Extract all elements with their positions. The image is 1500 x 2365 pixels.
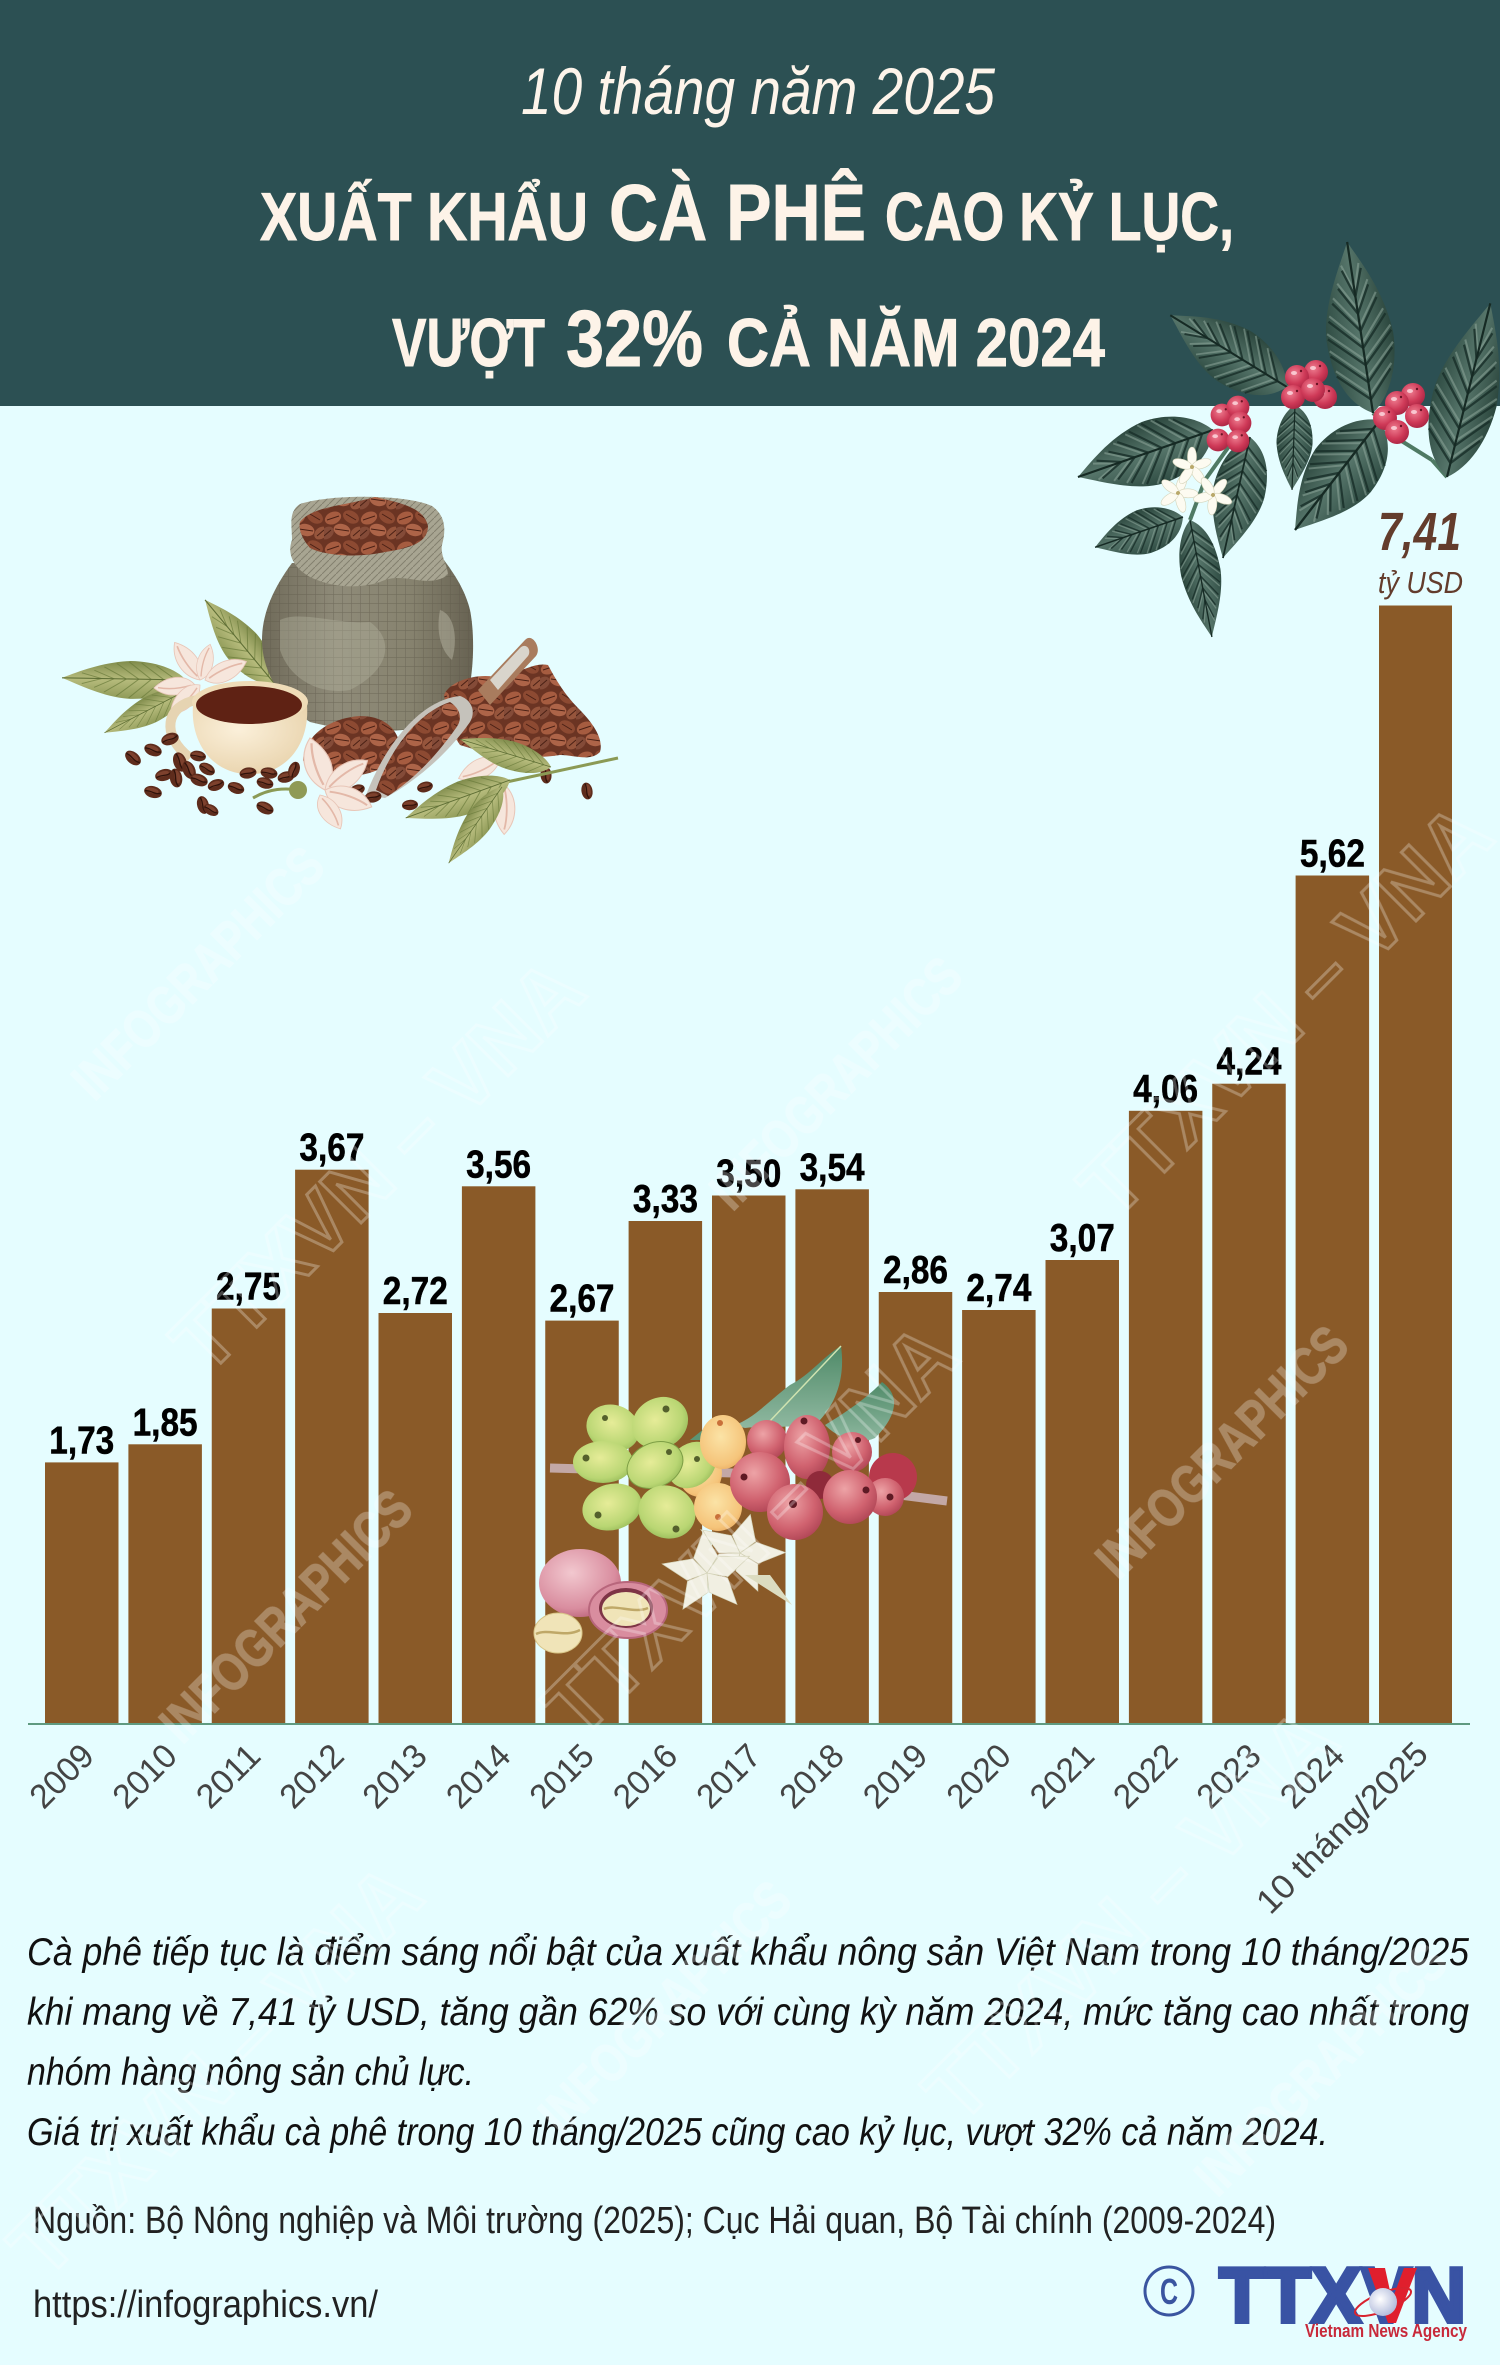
value labels: 1,85 (133, 1401, 198, 1444)
highlighted value 7,41 (1378, 502, 1463, 600)
value labels: 2,72 (383, 1270, 448, 1313)
axis labels: 2017 (689, 1737, 768, 1816)
watermarks: TTXVN – VNA (0, 1846, 440, 2295)
body text: nhóm hàng nông sản chủ lực. (27, 2051, 474, 2094)
title: CẢ NĂM 2024 (727, 304, 1105, 381)
value labels: 5,62 (1300, 832, 1365, 876)
axis labels (22, 1735, 1436, 1921)
title (260, 168, 1234, 383)
website link: https://infographics.vn/ (33, 2284, 378, 2326)
watermarks: TTXVN – VNA (153, 941, 602, 1390)
title: 32% (566, 294, 703, 383)
blush flower behind cup (153, 637, 249, 717)
green bean (534, 1613, 582, 1653)
cup (170, 681, 308, 774)
sack (262, 497, 473, 731)
axis line (28, 1723, 1470, 1725)
highlighted value 7,41: tỷ USD (1378, 565, 1463, 600)
highlighted value 7,41: 7,41 (1378, 502, 1461, 562)
pink fruit (539, 1549, 621, 1617)
body text (27, 1931, 1469, 2154)
berries (1207, 360, 1429, 452)
illustration: coffee cherries on a branch (534, 1346, 947, 1653)
watermarks: INFOGRAPHICS (527, 1869, 803, 2145)
stems (550, 1468, 947, 1501)
orange cherries behind (678, 1449, 722, 1497)
green leaves (690, 1346, 894, 1441)
watermarks: INFOGRAPHICS (60, 835, 336, 1111)
scattered beans (122, 730, 594, 819)
illustration: coffee sack, cup and beans (62, 497, 618, 871)
axis labels: 2009 (22, 1737, 102, 1816)
watermarks (0, 786, 1500, 2295)
axis labels: 2020 (939, 1737, 1019, 1816)
red cherries (730, 1415, 917, 1540)
sack collar (290, 497, 448, 586)
axis labels: 2010 (105, 1737, 185, 1816)
axis labels: 10 tháng/2025 (1249, 1735, 1436, 1921)
white flowers (656, 1502, 796, 1617)
logo: copyright and TTXVN: TTXVN (1219, 2251, 1466, 2339)
header band (0, 0, 1500, 406)
watermarks: TTXVN – VNA (906, 1691, 1355, 2140)
value labels: 3,54 (800, 1146, 865, 1189)
value labels: 3,07 (1050, 1217, 1115, 1260)
olive leaves (62, 588, 288, 745)
body text: Giá trị xuất khẩu cà phê trong 10 tháng/2025 cũng cao kỷ lục, vượt 32% cả năm 2024. (27, 2111, 1328, 2154)
title: CAO KỶ LỤC, (885, 178, 1234, 255)
axis labels: 2012 (272, 1737, 352, 1816)
axis labels: 2024 (1273, 1737, 1352, 1816)
green cherries (573, 1387, 725, 1548)
subtitle: 10 tháng năm 2025 (521, 54, 995, 128)
value labels: 2,67 (550, 1278, 614, 1321)
axis labels: 2013 (355, 1737, 435, 1816)
cut fruit (589, 1582, 667, 1638)
value labels: 4,24 (1216, 1041, 1282, 1084)
value labels: 2,74 (966, 1267, 1032, 1310)
value labels: 2,75 (216, 1266, 281, 1308)
illustration: coffee branch with berries (1068, 237, 1500, 640)
bean piles (303, 716, 400, 776)
orange cherries (694, 1415, 746, 1531)
watermarks: INFOGRAPHICS (1084, 1314, 1360, 1590)
beans in sack (300, 497, 428, 555)
stems and front leaves (253, 726, 618, 871)
value labels: 3,56 (466, 1143, 531, 1186)
axis labels: 2021 (1023, 1737, 1102, 1816)
title: CÀ PHÊ (609, 168, 866, 257)
title: VƯỢT (392, 305, 545, 381)
axis labels: 2019 (856, 1737, 935, 1816)
value labels: 4,06 (1133, 1068, 1198, 1111)
watermarks: TTXVN – VNA (526, 1306, 975, 1755)
value labels: 2,86 (883, 1249, 948, 1292)
logo: copyright and TTXVN: C (1160, 2271, 1178, 2312)
watermarks: INFOGRAPHICS (698, 945, 974, 1221)
axis labels: 2015 (522, 1737, 602, 1816)
axis labels: 2016 (606, 1737, 685, 1816)
axis labels: 2018 (772, 1737, 852, 1816)
axis labels: 2014 (439, 1737, 518, 1816)
axis labels: 2023 (1189, 1737, 1269, 1816)
blush flower front (304, 738, 375, 833)
value labels: 3,67 (299, 1127, 364, 1170)
value labels (49, 832, 1365, 1462)
value labels: 1,73 (49, 1419, 114, 1462)
axis labels: 2011 (189, 1737, 268, 1816)
value labels: 3,50 (716, 1152, 781, 1196)
source note: Nguồn: Bộ Nông nghiệp và Môi trường (2025); Cục Hải quan, Bộ Tài chính (2009-2024) (33, 2200, 1276, 2242)
title: XUẤT KHẨU (260, 178, 588, 255)
scoop (366, 638, 538, 798)
logo: copyright and TTXVN: Vietnam News Agency (1305, 2321, 1467, 2341)
watermarks: INFOGRAPHICS (148, 1478, 424, 1754)
flowers (1152, 447, 1241, 523)
bar chart (22, 502, 1470, 1921)
axis labels: 2022 (1106, 1737, 1185, 1816)
bars (45, 606, 1452, 1724)
value labels: 3,33 (633, 1178, 698, 1221)
